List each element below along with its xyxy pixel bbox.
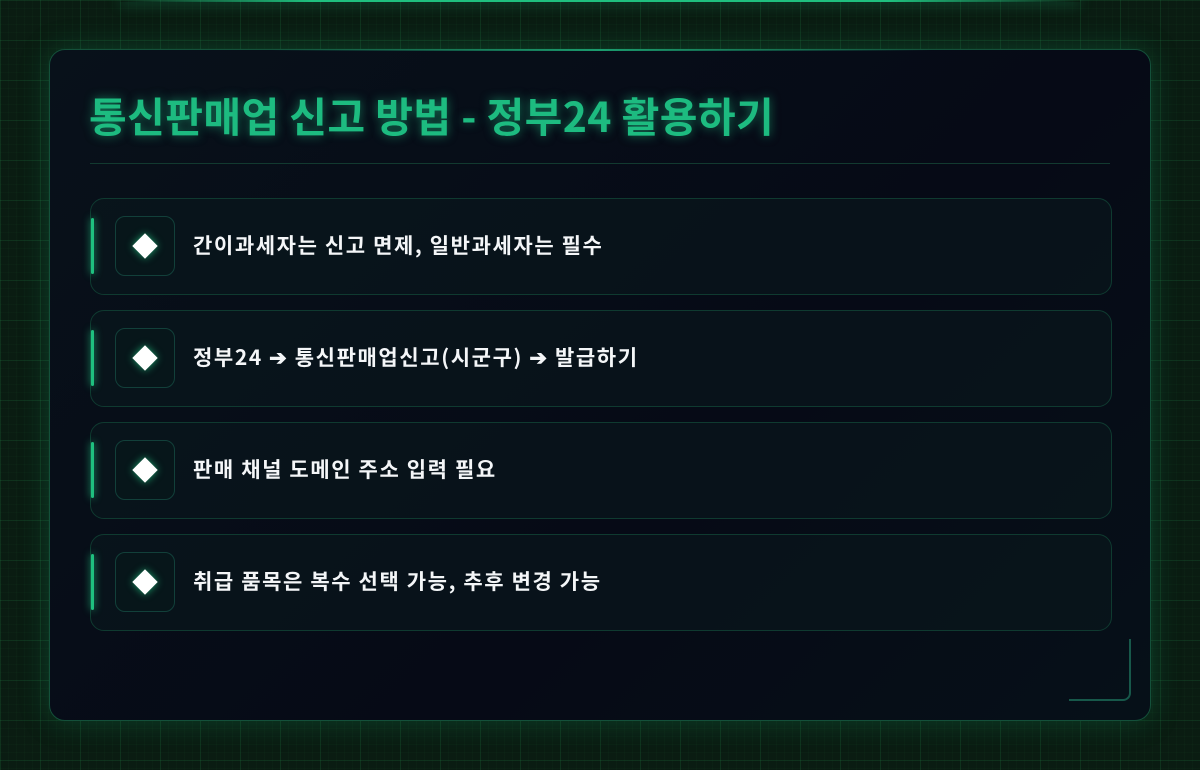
icon: diamond (115, 328, 175, 388)
icon: diamond (115, 552, 175, 612)
text: 판매 채널 도메인 주소 입력 필요 (193, 454, 497, 484)
corner bracket (1069, 639, 1131, 701)
text: 간이과세자는 신고 면제, 일반과세자는 필수 (193, 230, 603, 260)
item 2 (90, 310, 1112, 407)
item 3 (90, 422, 1112, 519)
title: 통신판매업 신고 방법 - 정부24 활용하기 (89, 84, 774, 144)
item 4 (90, 534, 1112, 631)
icon: diamond (115, 216, 175, 276)
item 1 (90, 198, 1112, 295)
icon: diamond (115, 440, 175, 500)
text: 정부24 ➔ 통신판매업신고(시군구) ➔ 발급하기 (193, 342, 639, 372)
text: 취급 품목은 복수 선택 가능, 추후 변경 가능 (193, 566, 602, 596)
